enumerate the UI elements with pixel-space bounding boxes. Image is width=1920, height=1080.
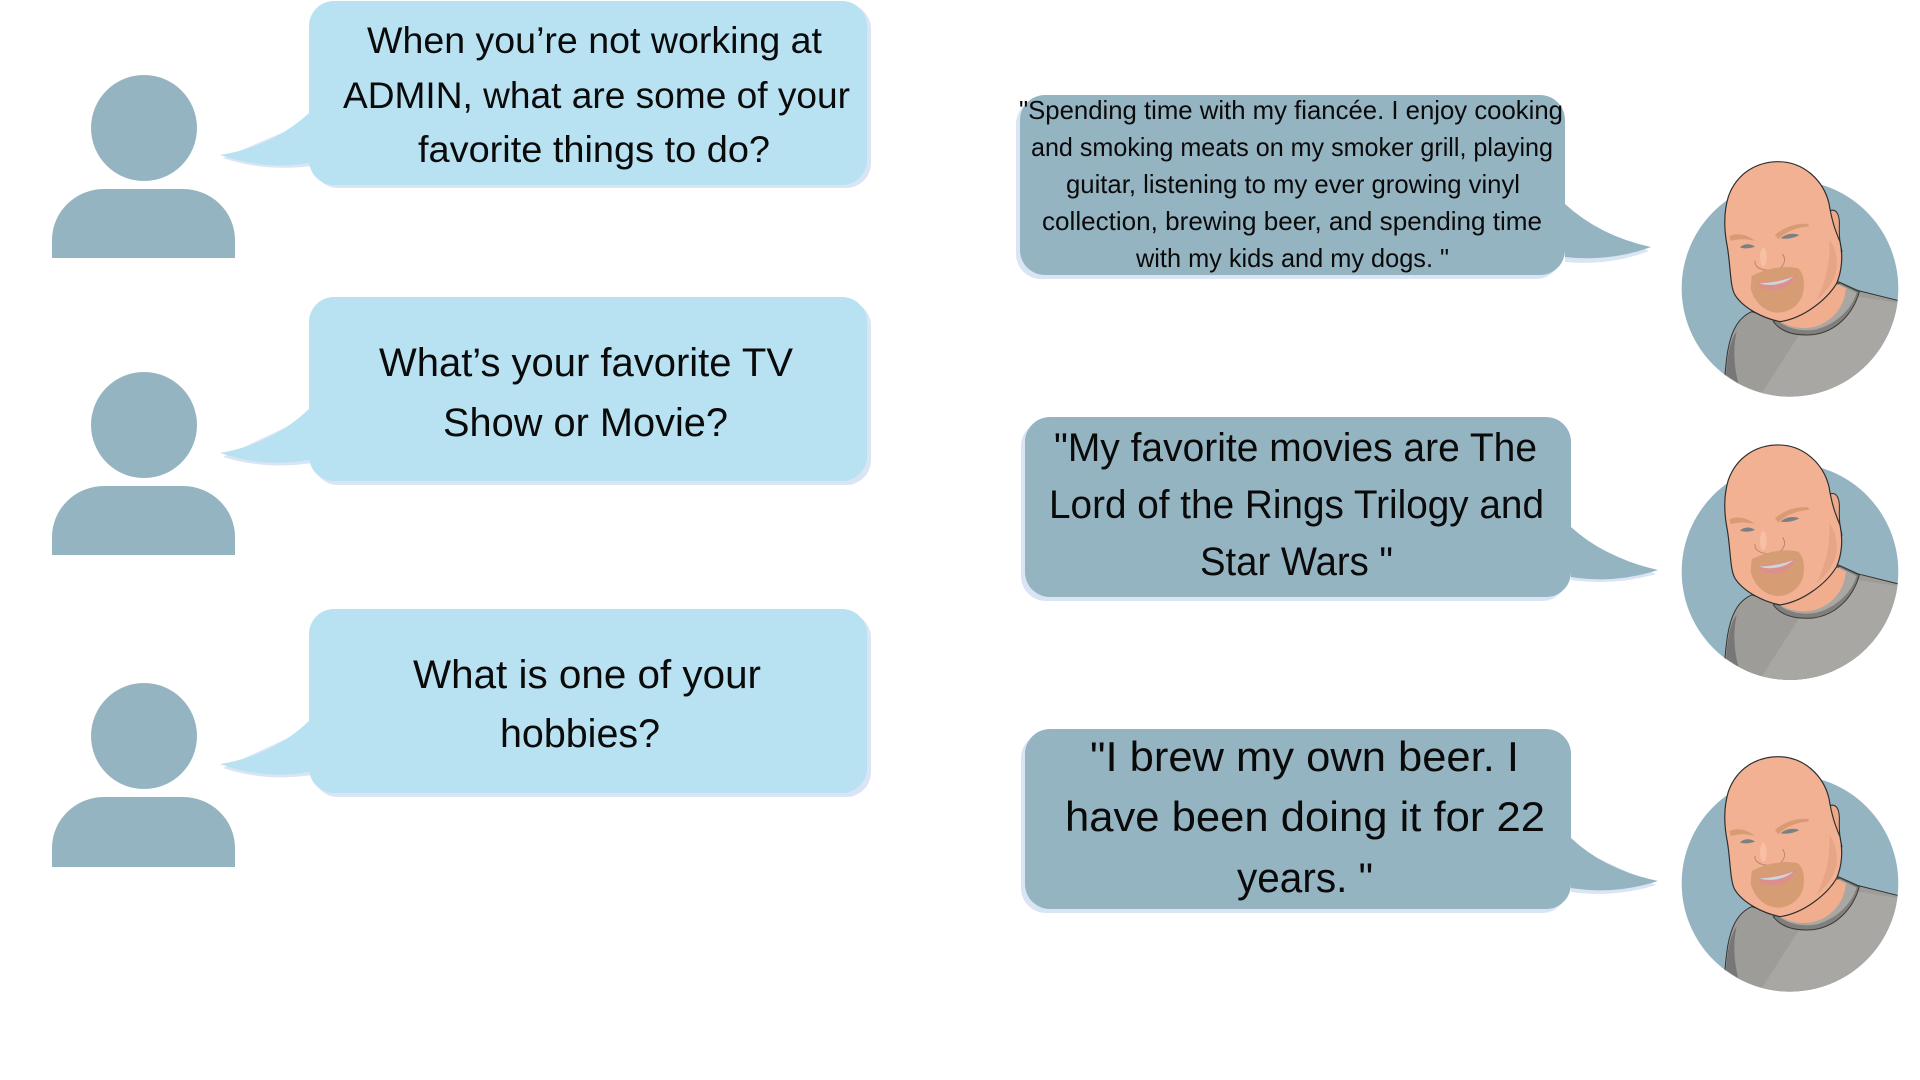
question text 1: favorite things to do?	[418, 129, 770, 170]
person icon: third asker	[52, 683, 235, 867]
question text 2: Show or Movie?	[443, 401, 728, 445]
question text 3: hobbies?	[500, 712, 660, 756]
person icon: second asker	[52, 372, 235, 555]
answer text 1	[1019, 95, 1563, 273]
speech bubble: second question	[220, 297, 871, 485]
avatar: illustrated man, second answer	[1682, 445, 1907, 690]
answer text 1: with my kids and my dogs. "	[1135, 243, 1449, 273]
question text 2	[379, 341, 793, 445]
answer text 1: "Spending time with my fiancée. I enjoy cooking	[1019, 95, 1563, 125]
question text 2: What’s your favorite TV	[379, 341, 793, 385]
answer text 3: have been doing it for 22	[1065, 793, 1545, 840]
answer text 2: Star Wars "	[1200, 540, 1393, 584]
answer text 1: guitar, listening to my ever growing vinyl	[1066, 169, 1520, 199]
speech bubble: second answer	[1021, 417, 1658, 601]
answer text 2	[1049, 426, 1544, 584]
avatar: illustrated man, first answer	[1682, 162, 1907, 407]
speech bubble: first answer	[1016, 95, 1651, 279]
answer text 1: collection, brewing beer, and spending time	[1042, 206, 1542, 236]
question text 3	[413, 653, 761, 756]
avatar: illustrated man, third answer	[1682, 757, 1907, 1002]
question text 1: ADMIN, what are some of your	[343, 75, 850, 116]
question text 1: When you’re not working at	[367, 20, 823, 61]
speech bubble: third question	[220, 609, 871, 797]
answer text 1: and smoking meats on my smoker grill, playing	[1031, 132, 1553, 162]
answer text 3: years. "	[1237, 854, 1373, 901]
speech bubble: first question	[220, 1, 871, 188]
person icon: first asker	[52, 75, 235, 258]
answer text 2: "My favorite movies are The	[1054, 426, 1537, 470]
question text 3: What is one of your	[413, 653, 761, 697]
question text 1	[343, 20, 850, 170]
answer text 2: Lord of the Rings Trilogy and	[1049, 483, 1544, 527]
speech bubble: third answer	[1021, 729, 1658, 913]
answer text 3: "I brew my own beer. I	[1090, 733, 1519, 780]
answer text 3	[1065, 733, 1545, 901]
